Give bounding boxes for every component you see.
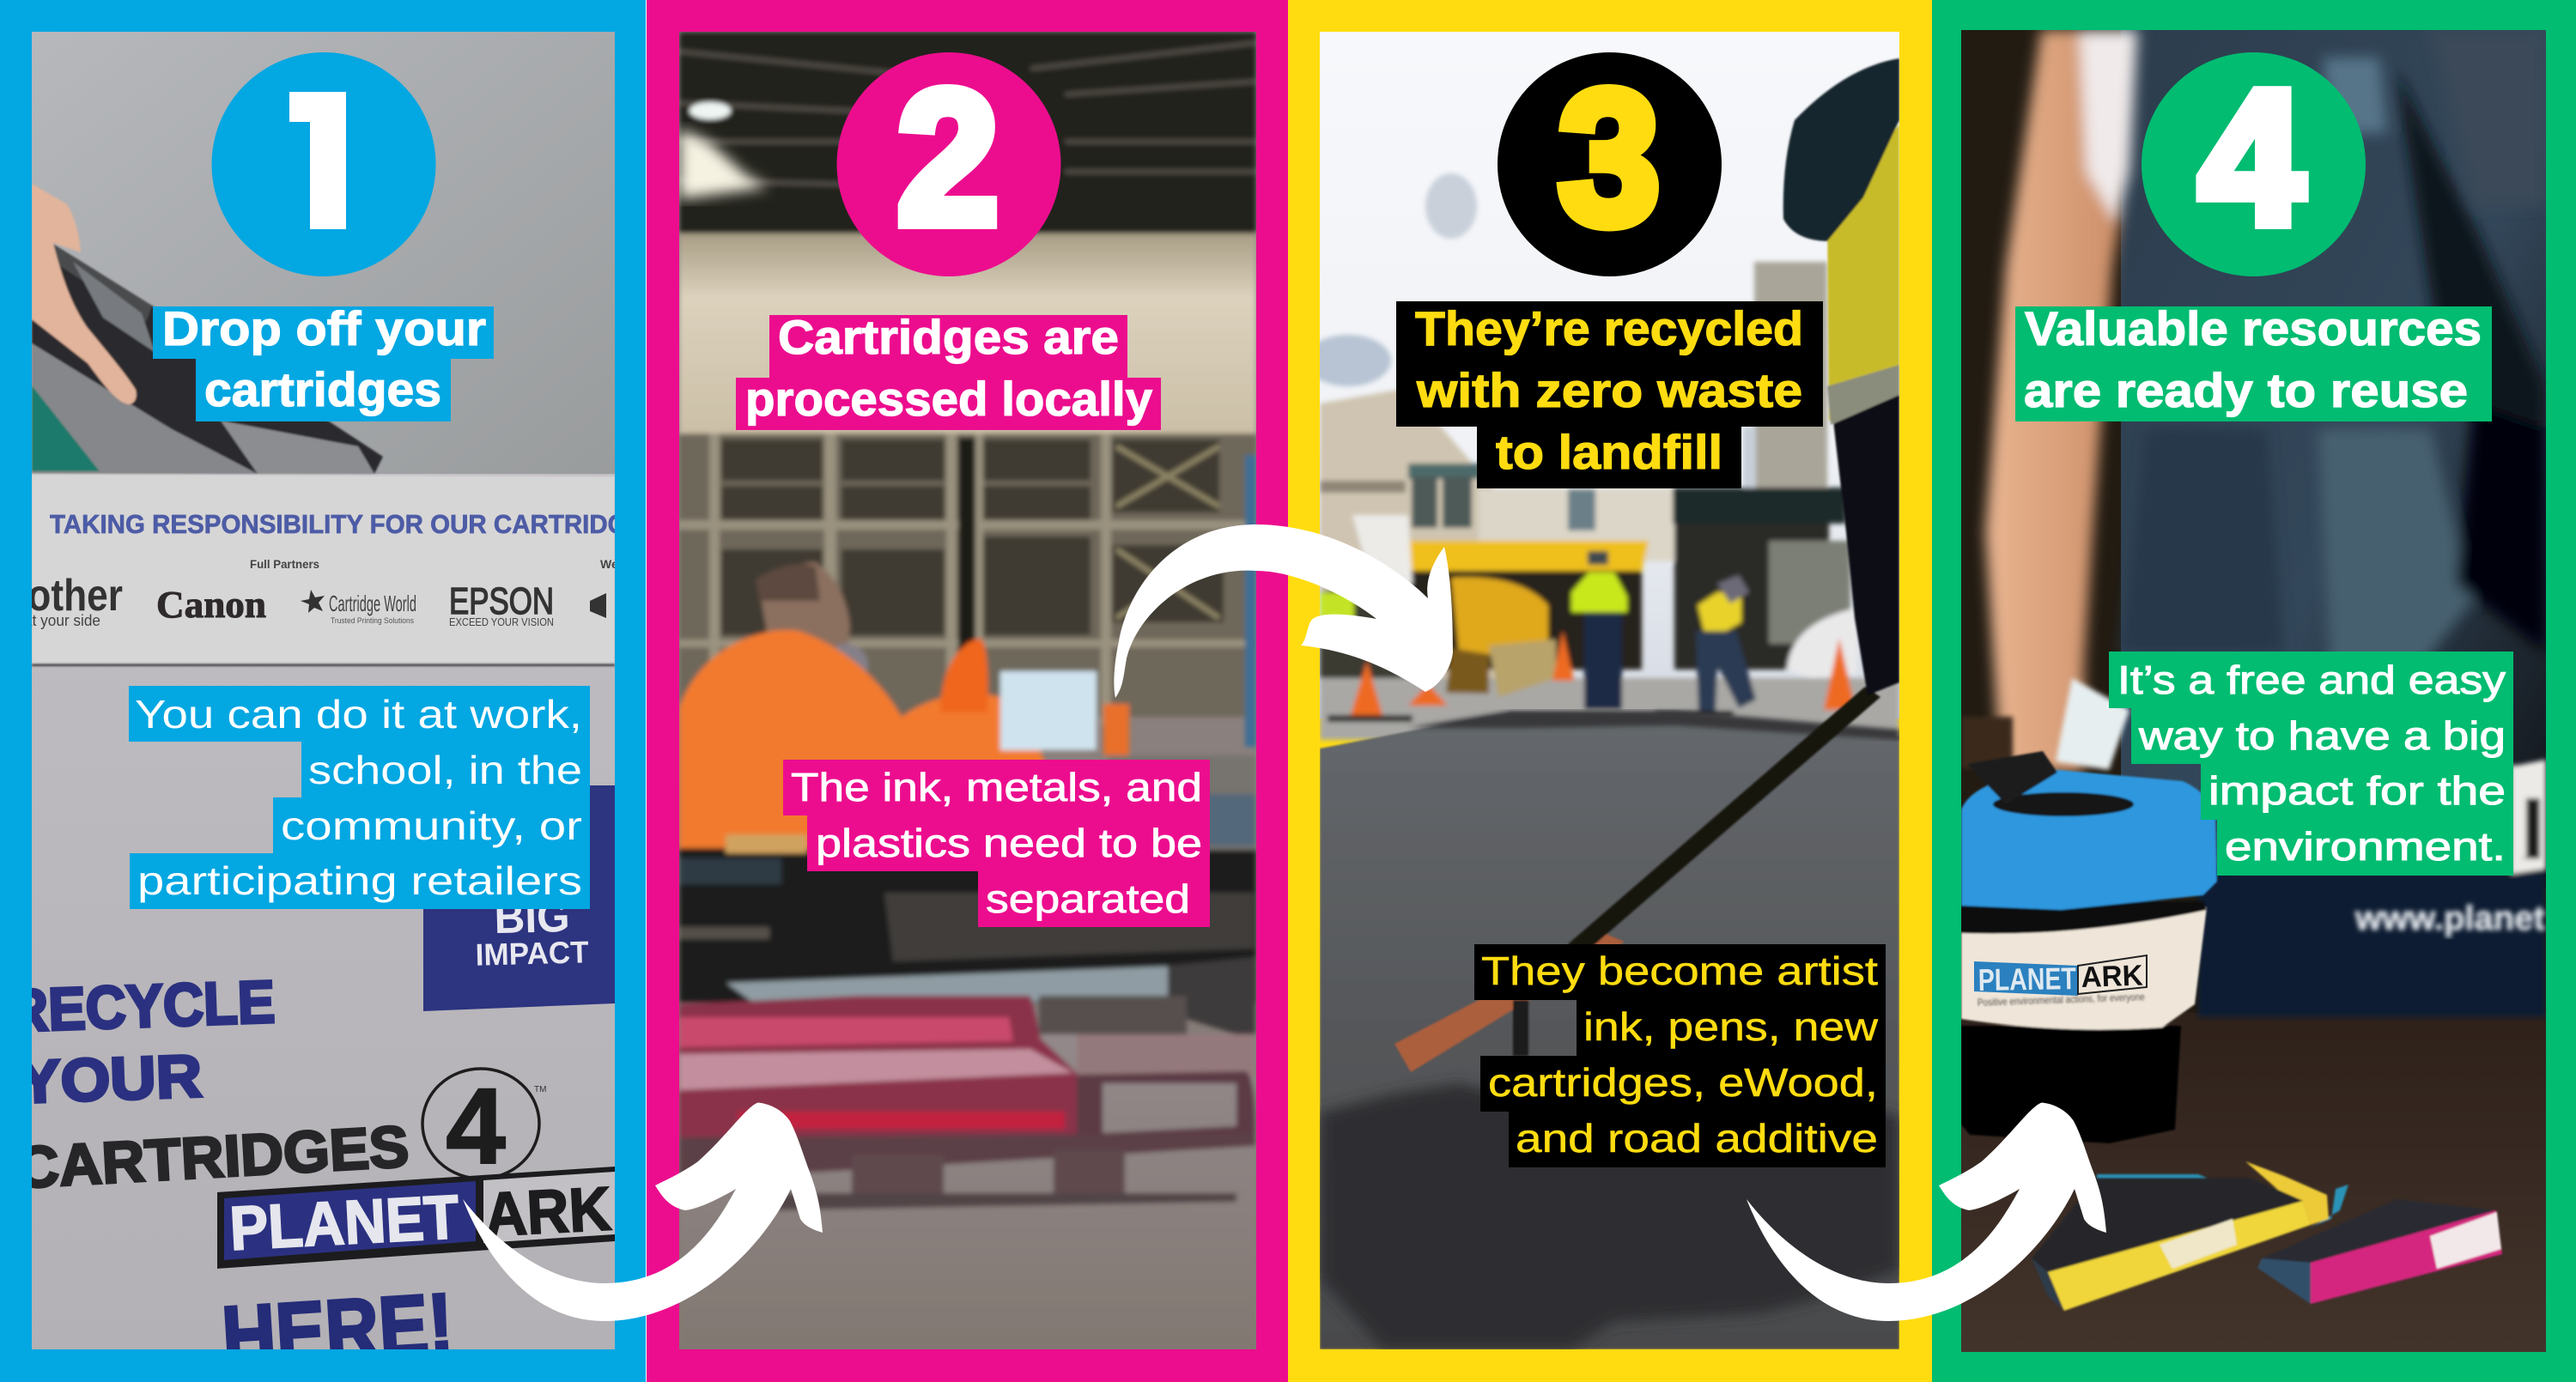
- photo: Planet Ark keep cup and ink cartridges: Positive environmental actions, for everyone: [1978, 991, 2145, 1009]
- photo: cartridge going into collection box: TAKING RESPONSIBILITY FOR OUR CARTRIDGES: [50, 509, 661, 539]
- photo: cartridge going into collection box: BIG: [494, 892, 570, 943]
- photo: cartridge going into collection box: PLANET: [228, 1183, 460, 1264]
- heading: valuable resources ready to reuse: [2015, 301, 2492, 421]
- photo: Planet Ark keep cup and ink cartridges: www.planet: [2354, 900, 2545, 937]
- photo: Planet Ark keep cup and ink cartridges: PLANET: [1978, 961, 2076, 997]
- number badge 1: 1: [264, 50, 375, 272]
- heading: recycled with zero waste: to landfill: [1496, 425, 1722, 479]
- photo: Planet Ark keep cup and ink cartridges: [1961, 30, 2546, 1352]
- text block: recycled products: ink, pens, new: [1583, 1004, 1879, 1049]
- text block: materials are separated: The ink, metals, and: [791, 765, 1202, 809]
- arrow: step 2 to step 3: [1114, 524, 1453, 698]
- text block: free and easy impact: It’s a free and easy: [2117, 658, 2506, 702]
- heading: drop off your cartridges: Drop off your: [162, 301, 486, 355]
- photo: cartridge going into collection box: Trusted Printing Solutions: [331, 616, 414, 626]
- number badge 3: [1498, 52, 1722, 276]
- panel: step 2 processing: [647, 0, 1288, 1382]
- heading: recycled with zero waste: [1396, 301, 1823, 488]
- heading: cartridges are processed locally: Cartridges are: [778, 310, 1119, 364]
- photo: cartridge going into collection box: CARTRIDGES: [15, 1113, 410, 1201]
- text block: free and easy impact: way to have a big: [2138, 713, 2506, 758]
- photo: cartridge going into collection box: Full Partners: [250, 557, 319, 571]
- panel: step 3 recycled: [1288, 0, 1932, 1382]
- photo: cartridge going into collection box: TM: [534, 1085, 546, 1094]
- arrow: step 3 to step 4: [1747, 1102, 2106, 1321]
- text block: recycled products: and road additive: [1516, 1116, 1878, 1161]
- heading: drop off your cartridges: [153, 301, 494, 421]
- number badge 3: 3: [1558, 52, 1660, 264]
- text block: recycled products: They become artist: [1481, 949, 1878, 993]
- text block: materials are separated: plastics need to be: [816, 821, 1202, 865]
- text block: where to drop off: participating retailers: [137, 858, 582, 903]
- text block: free and easy impact: [2109, 652, 2513, 876]
- text block: materials are separated: [783, 760, 1210, 927]
- text block: recycled products: [1474, 944, 1886, 1167]
- text block: where to drop off: community, or: [281, 803, 582, 848]
- heading: drop off your cartridges: cartridges: [204, 362, 441, 416]
- photo: cartridge going into collection box: IMPACT: [475, 934, 589, 973]
- photo: cartridge going into collection box: ARK: [483, 1174, 613, 1250]
- photo: cartridge going into collection box: Cartridge World: [329, 591, 416, 616]
- photo: cartridge going into collection box: EPSON: [449, 580, 554, 622]
- text block: where to drop off: [129, 686, 590, 909]
- photo: workers sorting cartridges in a warehouse: [679, 32, 1256, 1349]
- photo: cartridge going into collection box: EXCEED YOUR VISION: [449, 615, 554, 628]
- photo: cartridge going into collection box: 4: [446, 1067, 506, 1186]
- number badge 4: 4: [2199, 52, 2304, 264]
- photo: cartridge going into collection box: YOUR: [17, 1042, 203, 1116]
- photo: Planet Ark keep cup and ink cartridges: ARK: [2081, 959, 2144, 994]
- photo: road crew laying recycled asphalt: [1305, 32, 1899, 1349]
- panel: step 1 drop off: [0, 0, 661, 1382]
- heading: cartridges are processed locally: [736, 310, 1161, 430]
- number badge 2: [836, 52, 1061, 276]
- photo: cartridge going into collection box: RECYCLE: [7, 968, 276, 1045]
- text block: recycled products: cartridges, eWood,: [1488, 1060, 1878, 1105]
- arrow: step 1 to step 2: [463, 1102, 823, 1321]
- text block: free and easy impact: environment.: [2225, 824, 2506, 869]
- text block: where to drop off: You can do it at work,: [135, 692, 582, 736]
- photo: cartridge going into collection box: We: [600, 557, 618, 571]
- heading: recycled with zero waste: with zero waste: [1416, 363, 1802, 417]
- text block: free and easy impact: impact for the: [2208, 768, 2506, 813]
- text block: where to drop off: school, in the: [308, 748, 582, 792]
- number badge 4: [2142, 52, 2366, 276]
- number badge 1: [211, 50, 436, 276]
- photo: cartridge going into collection box: [32, 32, 615, 1349]
- text block: materials are separated: separated: [986, 876, 1190, 921]
- panel: step 4 reuse: [1932, 0, 2576, 1382]
- heading: valuable resources ready to reuse: are ready to reuse: [2024, 363, 2468, 417]
- number badge 2: 2: [897, 52, 999, 264]
- photo: cartridge going into collection box: at your side: [24, 612, 100, 629]
- photo: cartridge going into collection box: Canon: [156, 584, 266, 626]
- heading: cartridges are processed locally: processed locally: [745, 372, 1152, 426]
- heading: valuable resources ready to reuse: Valuable resources: [2025, 301, 2482, 355]
- heading: recycled with zero waste: They’re recycled: [1415, 301, 1803, 355]
